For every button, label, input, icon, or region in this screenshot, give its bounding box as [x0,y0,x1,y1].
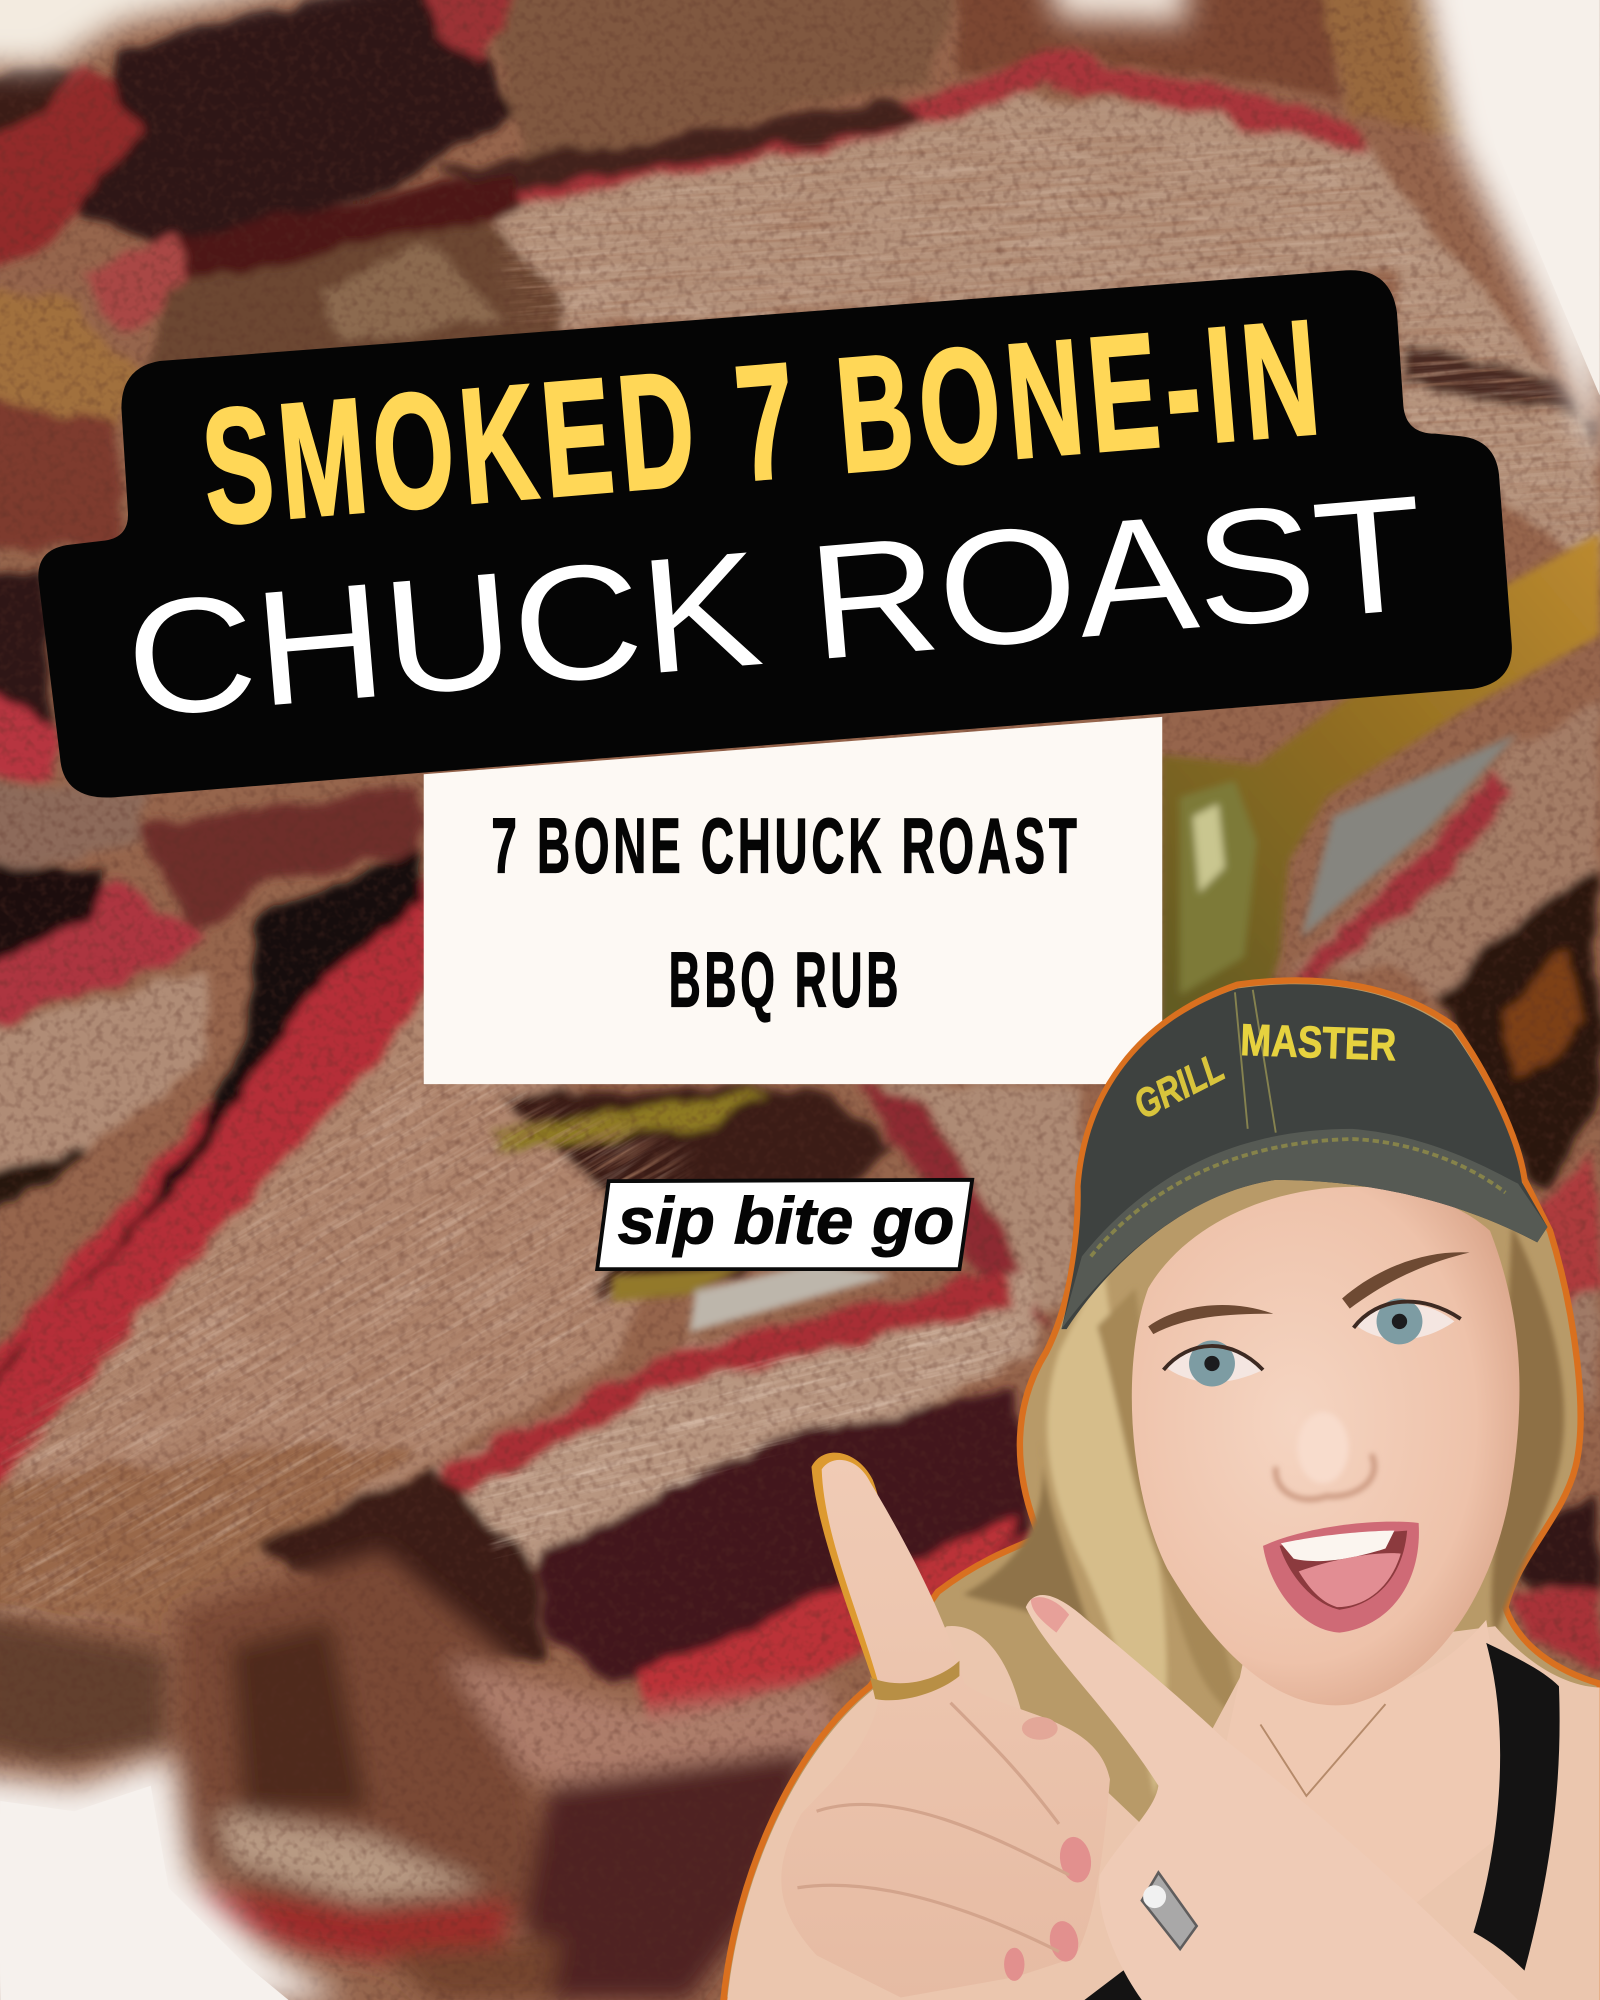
mouth [1263,1522,1419,1633]
mid gap [498,1084,893,1301]
nose [1276,1412,1374,1499]
plate bottom left core [0,1786,289,2000]
hat text: MASTER: MASTER [1240,1016,1397,1070]
hat text: GRILL: GRILL [1126,1044,1231,1128]
bottom blurred area [0,1614,166,1767]
top dark crust [77,0,517,249]
subtitle line 2: BBQ RUB [669,937,902,1023]
ring on finger [870,1661,959,1700]
plate top left [0,0,408,66]
plate top right core [1467,0,1600,395]
subtitle line 1: 7 BONE CHUCK ROAST [491,803,1081,889]
meat fibre texture [0,1056,691,1608]
tank top strap [1473,1643,1560,1971]
main left slice [0,995,715,1620]
necklace [1260,1704,1385,1796]
arm and chest skin [727,1626,1600,2000]
face [1132,1187,1519,1705]
title banner [38,270,1512,798]
subtitle panel [424,717,1162,1084]
left upper slices [0,574,54,778]
heading line 2: CHUCK ROAST [119,460,1431,752]
plate under fork [1301,733,1518,938]
left hand raised finger [781,1453,1110,1997]
right eye [1354,1298,1461,1344]
wedding ring [1142,1872,1197,1949]
upper right slice [491,89,1600,574]
left eye [1164,1341,1263,1386]
right side meat [1289,702,1600,1020]
fork tine [612,1267,746,1301]
neck [1212,1620,1531,1913]
person cutout with hat [723,980,1600,2000]
centre lower slice [434,1269,1033,1582]
hat [1061,984,1547,1329]
plate top right blur [1416,0,1600,472]
right hand pointing finger [1026,1595,1518,2000]
panel background [424,717,1162,1084]
logo: sip bite go: sip bite go [618,1185,954,1259]
plate bottom left blur [0,1754,345,2000]
hair [963,1224,1564,1798]
right brow [1342,1252,1470,1309]
left brow [1148,1305,1273,1334]
banner black shape [38,270,1512,798]
orange outline silhouette [723,980,1600,2000]
gold fork [1161,533,1600,1040]
